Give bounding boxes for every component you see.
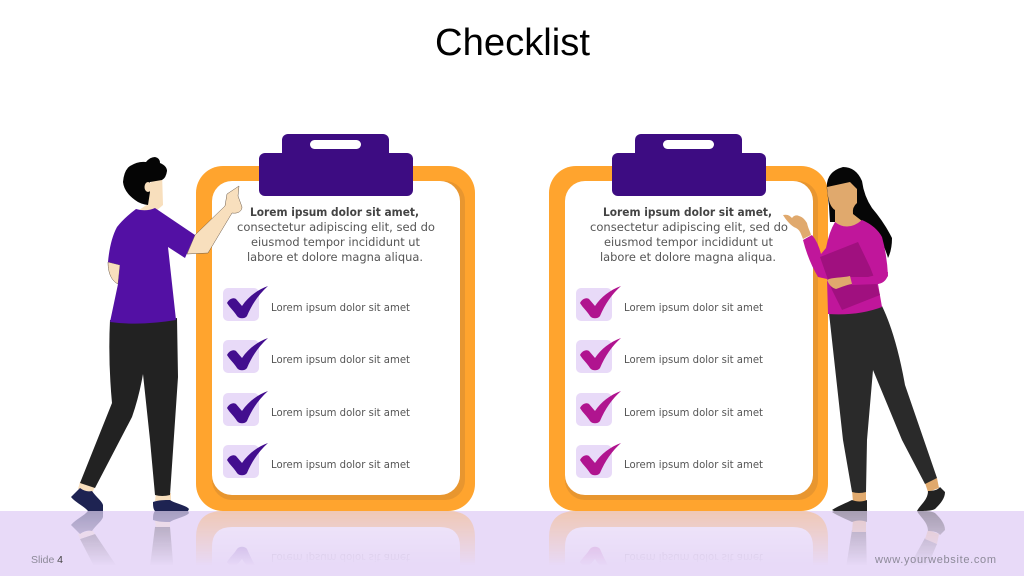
intro text: eiusmod tempor incididunt ut xyxy=(604,235,773,249)
illustration: woman with folder xyxy=(783,167,945,511)
checklist item 1 xyxy=(223,286,410,321)
panel: right clipboard xyxy=(549,134,828,511)
checklist item 1 xyxy=(576,286,763,321)
illustration: man pointing xyxy=(71,157,242,511)
intro text: labore et dolore magna aliqua. xyxy=(247,250,423,264)
woman's shoes xyxy=(832,487,945,511)
man's hair xyxy=(123,157,167,205)
man's shoes xyxy=(71,488,189,511)
checklist item 2: Lorem ipsum dolor sit amet xyxy=(271,354,410,366)
woman's folder xyxy=(820,242,880,310)
clipboard clip xyxy=(612,134,766,196)
woman's raised hand xyxy=(783,215,811,239)
woman's hair xyxy=(827,167,892,258)
clipboard clip xyxy=(259,134,413,196)
floor reflection: Lorem ipsum dolor sit amet xyxy=(271,551,410,563)
intro text xyxy=(237,205,435,264)
woman's neck and face xyxy=(827,182,862,227)
checklist item 4: Lorem ipsum dolor sit amet xyxy=(624,459,763,471)
intro text: labore et dolore magna aliqua. xyxy=(600,250,776,264)
checklist item 1: Lorem ipsum dolor sit amet xyxy=(624,302,763,314)
checklist item 1: Lorem ipsum dolor sit amet xyxy=(271,302,410,314)
intro text: consectetur adipiscing elit, sed do xyxy=(590,220,788,234)
checklist item 3: Lorem ipsum dolor sit amet xyxy=(624,407,763,419)
checklist item 3 xyxy=(576,391,763,426)
floor reflection xyxy=(71,511,945,560)
intro text: Lorem ipsum dolor sit amet, xyxy=(603,205,772,219)
intro text: Lorem ipsum dolor sit amet, xyxy=(250,205,419,219)
footer: website: www.yourwebsite.com xyxy=(874,554,996,566)
intro text xyxy=(590,205,788,264)
checklist item 3: Lorem ipsum dolor sit amet xyxy=(271,407,410,419)
woman's ankles xyxy=(852,478,939,502)
checklist item 2 xyxy=(223,338,410,373)
man's neck and face xyxy=(136,172,163,212)
woman's trousers xyxy=(829,306,937,493)
intro text: eiusmod tempor incididunt ut xyxy=(251,235,420,249)
floor band xyxy=(0,511,1024,576)
woman's forearm xyxy=(850,272,888,285)
man's pointing arm xyxy=(187,186,242,254)
footer: slide number: Slide 4 xyxy=(31,554,63,566)
checklist item 3 xyxy=(223,391,410,426)
man's ear xyxy=(144,182,152,192)
title: Checklist xyxy=(435,22,590,64)
man's trousers xyxy=(80,318,178,496)
floor reflection: Lorem ipsum dolor sit amet xyxy=(624,551,763,563)
woman's sweater xyxy=(803,220,888,314)
checklist item 4 xyxy=(223,443,410,478)
intro text: consectetur adipiscing elit, sed do xyxy=(237,220,435,234)
woman's hand on folder xyxy=(827,276,852,289)
checklist item 4: Lorem ipsum dolor sit amet xyxy=(271,459,410,471)
checklist item 2 xyxy=(576,338,763,373)
man's left hand xyxy=(108,262,120,284)
man's ankles xyxy=(78,482,171,501)
panel: left clipboard xyxy=(196,134,475,511)
man's shirt xyxy=(108,208,195,324)
checklist item 2: Lorem ipsum dolor sit amet xyxy=(624,354,763,366)
checklist item 4 xyxy=(576,443,763,478)
